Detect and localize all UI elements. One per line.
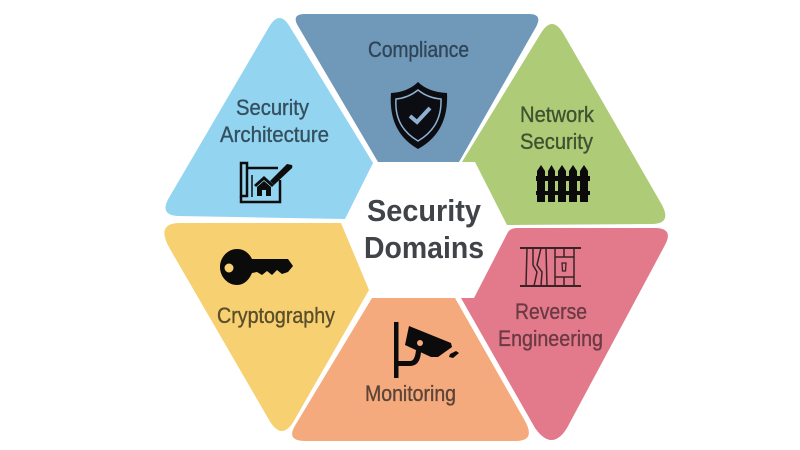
center title: Domains [364, 230, 484, 265]
panel: monitoring [292, 298, 529, 441]
panel: network security [462, 24, 665, 225]
label: reverse engineering: Reverse [515, 299, 587, 324]
panel: reverse engineering [461, 228, 668, 440]
panel: security architecture [166, 18, 373, 219]
label: security architecture: Architecture [220, 122, 329, 147]
icon: blueprint house [241, 163, 292, 202]
panel: compliance [296, 14, 538, 162]
icon: jail door [520, 248, 581, 286]
label: network security [520, 102, 595, 154]
panel: cryptography [164, 223, 369, 431]
label: security architecture [220, 95, 329, 147]
label: reverse engineering [498, 299, 603, 351]
label: monitoring: Monitoring [365, 381, 456, 406]
icon: fence [536, 165, 590, 202]
label: network security: Security [520, 129, 593, 154]
icon: security camera [394, 322, 459, 378]
center title [364, 193, 484, 265]
label: network security: Network [520, 102, 595, 127]
label: cryptography: Cryptography [217, 303, 335, 328]
center title: Security [367, 193, 482, 228]
label: reverse engineering: Engineering [498, 326, 603, 351]
label: security architecture: Security [236, 95, 309, 120]
icon: key [220, 249, 293, 285]
icon: shield with check [391, 82, 447, 149]
label: compliance: Compliance [368, 37, 469, 62]
